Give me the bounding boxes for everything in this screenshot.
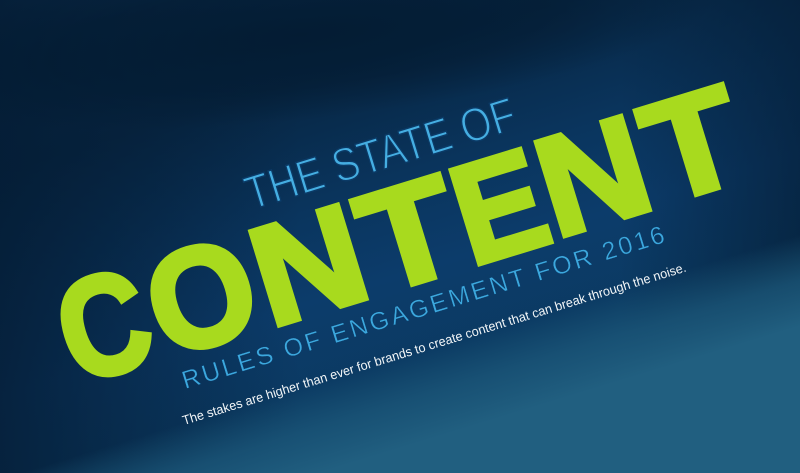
title word: CONTENT xyxy=(39,55,762,416)
headline block xyxy=(39,55,762,428)
title word: CONTENT: T xyxy=(341,145,477,324)
subtitle: rules of engagement: RULES OF ENGAGEMENT FOR 2016 xyxy=(179,221,668,395)
title line: THE STATE OF: THE STATE OF xyxy=(238,87,522,220)
title word: CONTENT: N xyxy=(518,84,667,267)
background: right shadow xyxy=(620,0,800,473)
title word: CONTENT: N xyxy=(233,174,384,357)
title word: CONTENT: O xyxy=(128,206,275,388)
background: top shadow xyxy=(0,0,800,160)
title word: CONTENT: C xyxy=(39,237,169,414)
title word: CONTENT: E xyxy=(434,119,565,296)
background: left shadow xyxy=(0,0,300,473)
tagline: The stakes are higher than ever for brands to create content that can break through the noise. xyxy=(180,260,688,428)
title word: CONTENT: T xyxy=(625,56,761,234)
